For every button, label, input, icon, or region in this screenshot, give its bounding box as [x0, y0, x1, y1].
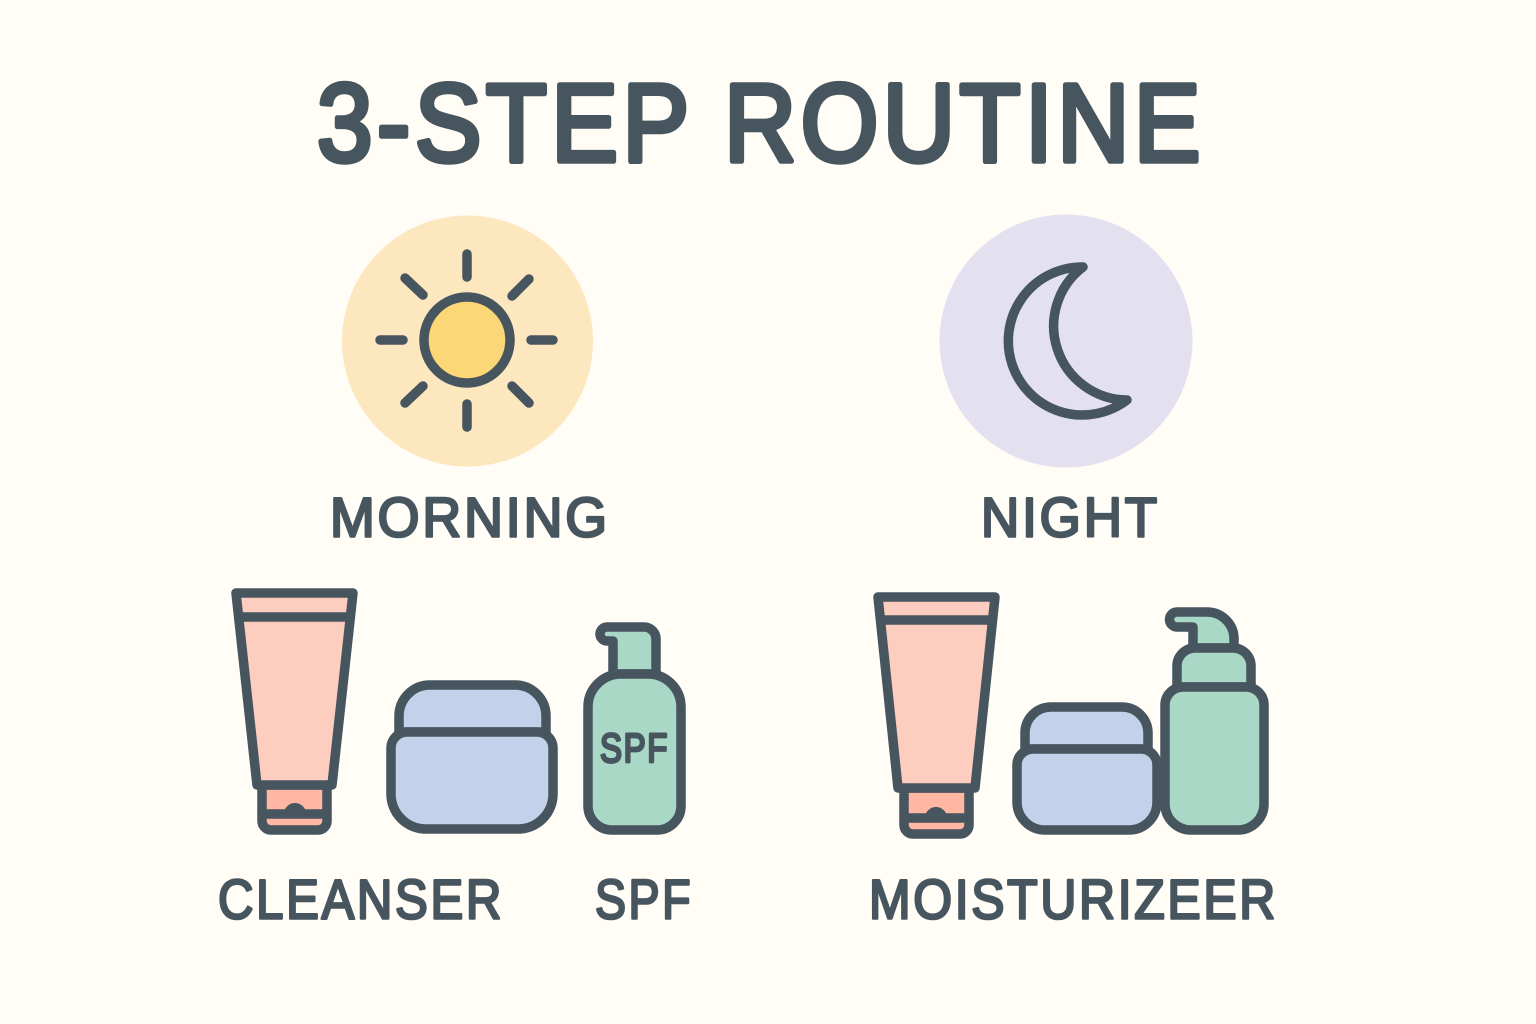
- title: 3-STEP ROUTINE: [317, 62, 1205, 185]
- icon: cream jar: [391, 685, 553, 829]
- heading: morning: MORNING: [330, 486, 610, 548]
- label: moisturizeer: MOISTURIZEER: [869, 868, 1278, 930]
- icon: spf bottle: [588, 627, 681, 830]
- panel: night products: [869, 597, 1278, 930]
- panel: morning: [330, 216, 610, 548]
- heading: night: NIGHT: [981, 486, 1160, 548]
- icon: cleanser tube: [236, 593, 353, 830]
- icon: cleanser tube: [878, 597, 995, 834]
- icon: cream jar: [1017, 707, 1157, 830]
- icon: sun badge: [342, 216, 593, 466]
- label: spf: SPF: [595, 868, 693, 930]
- panel: night: [940, 214, 1192, 548]
- label: cleanser: CLEANSER: [218, 868, 504, 930]
- icon: pump bottle: [1165, 612, 1264, 830]
- bottle label: spf: SPF: [600, 725, 669, 771]
- icon: moon badge: [940, 214, 1192, 468]
- panel: morning products: [218, 593, 693, 930]
